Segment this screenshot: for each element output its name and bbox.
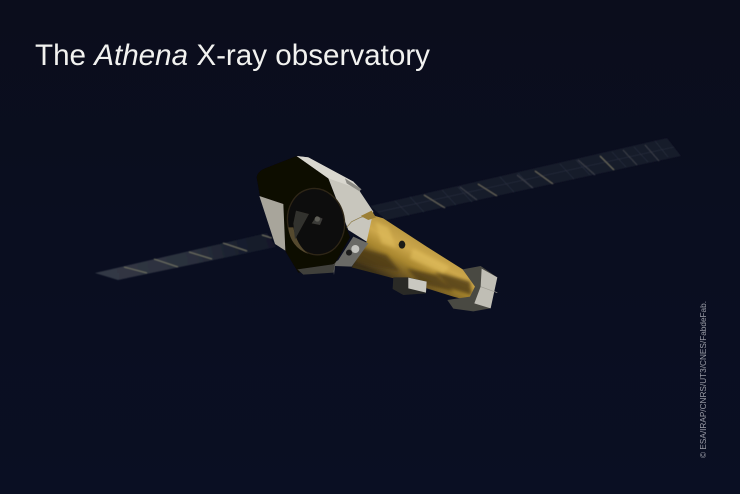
collar [333, 237, 368, 275]
spacecraft [257, 156, 497, 311]
gold foil telescope tube [352, 214, 476, 301]
rear instrument module [447, 266, 497, 311]
right solar panel [370, 138, 681, 220]
white sunshield panel [297, 156, 373, 242]
dark hood [257, 156, 350, 273]
grey lower shade [297, 264, 335, 275]
image credit: © ESA/IRAP/CNRS/UT3/CNES/FabdeFab. [698, 301, 708, 458]
left solar panel [95, 233, 276, 280]
title: The Athena X-ray observatory [35, 39, 430, 72]
side instrument box [393, 277, 427, 295]
telescope aperture [281, 183, 351, 260]
tube port [399, 241, 405, 249]
left shield panel [259, 196, 285, 251]
gold joint [361, 211, 376, 220]
